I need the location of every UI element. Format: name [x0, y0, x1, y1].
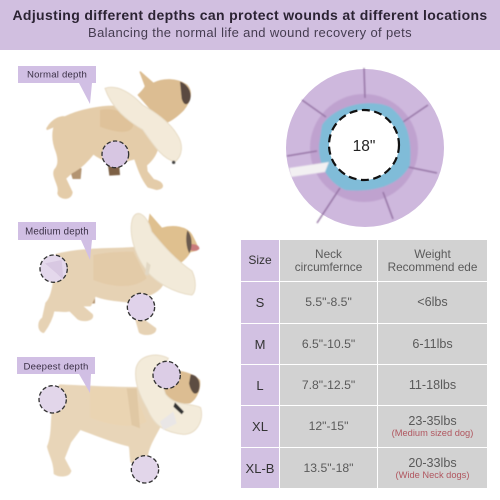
size label: 18": [353, 138, 375, 155]
row S: [241, 282, 487, 323]
wound marker: [102, 141, 129, 168]
row L: L: [256, 378, 264, 392]
header row: Recommend ede: [388, 260, 477, 274]
callout: deepest depth: [17, 357, 95, 393]
dog: normal depth: [47, 72, 191, 198]
row S: 5.5"-8.5": [305, 295, 352, 309]
row M: M: [255, 336, 265, 352]
neck opening: [329, 110, 399, 180]
callout: medium depth: Medium depth: [25, 226, 89, 238]
size table: [241, 240, 487, 488]
callout: normal depth: [18, 66, 96, 104]
row XL-B: XL-B: [246, 460, 274, 476]
row XL: [241, 406, 487, 447]
callout: normal depth: Normal depth: [27, 70, 87, 80]
callout: medium depth: [18, 222, 96, 260]
callout: deepest depth: Deepest depth: [23, 362, 89, 372]
header row: circumfernce: [295, 260, 362, 274]
header row: Weight: [414, 246, 451, 260]
row M: 6.5"-10.5": [302, 336, 355, 350]
subtitle: Balancing the normal life and wound recovery of pets: [88, 25, 412, 40]
row XL: (Medium sized dog): [392, 428, 473, 438]
header banner: [0, 0, 500, 50]
row XL: 23-35lbs: [408, 414, 457, 428]
row XL-B: [241, 448, 487, 488]
row L: [241, 365, 487, 405]
header row: Neck: [315, 246, 342, 260]
row XL-B: (Wide Neck dogs): [396, 470, 469, 480]
wound markers: [40, 255, 67, 282]
row L: 11-18lbs: [409, 378, 456, 392]
row L: 7.8"-12.5": [302, 378, 355, 392]
dog: deepest depth: [39, 355, 202, 483]
row S: <6lbs: [417, 295, 448, 309]
dog: medium depth: [40, 214, 199, 334]
header row: Size: [248, 253, 272, 267]
title: Adjusting different depths can protect wounds at different locations: [12, 7, 488, 23]
row XL: XL: [252, 419, 268, 434]
padded blue ring: [319, 103, 410, 191]
drawstring: [289, 162, 329, 177]
row XL-B: 13.5"-18": [304, 460, 354, 474]
row XL-B: 20-33lbs: [408, 456, 457, 470]
row M: [241, 324, 487, 364]
row M: 6-11lbs: [412, 336, 453, 350]
header row: [241, 240, 487, 281]
product: cone collar: [286, 68, 444, 227]
row S: S: [256, 295, 264, 310]
row XL: 12"-15": [309, 419, 348, 433]
wound markers: [39, 386, 66, 413]
